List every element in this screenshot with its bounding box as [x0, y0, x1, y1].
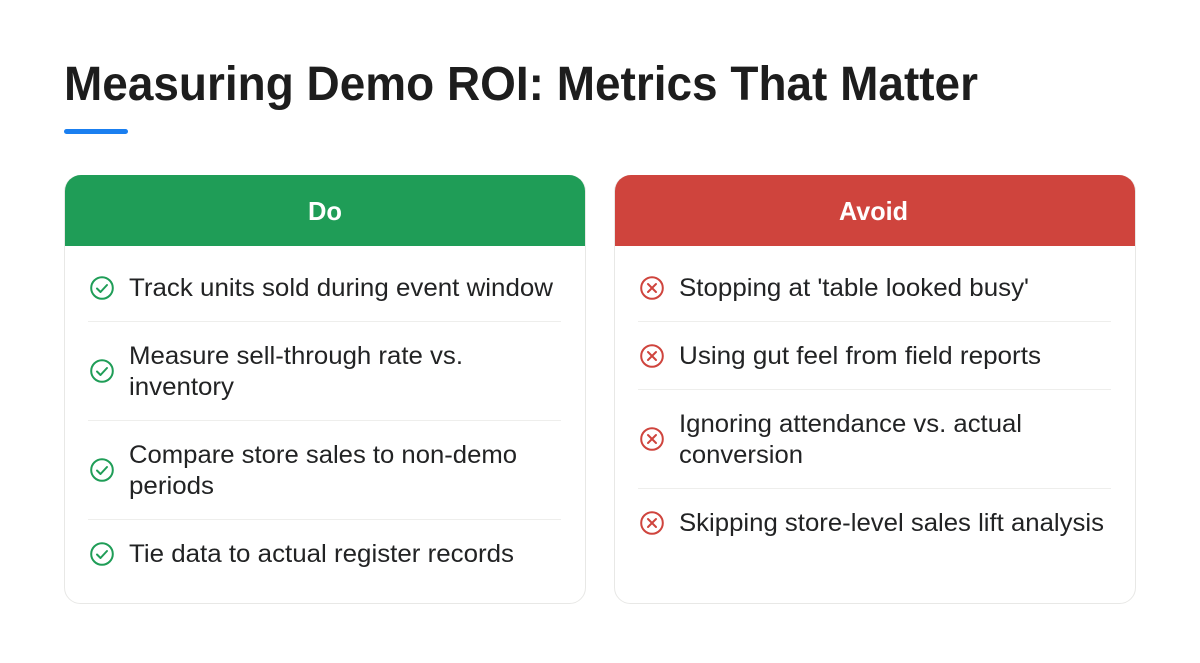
do item: compare store sales: [91, 441, 517, 500]
panel: do: [64, 175, 586, 604]
do item: track units: Track units sold during event window: [129, 274, 554, 302]
do heading: Do: [308, 196, 342, 226]
avoid item: sales lift: Skipping store-level sales lift analysis: [679, 509, 1104, 537]
title accent underline: [64, 129, 128, 134]
panel: avoid: [614, 175, 1136, 604]
avoid card background: [614, 176, 1136, 604]
avoid item: ignoring attendance: Ignoring attendance vs. actual: [679, 410, 1022, 438]
do item: sell-through: inventory: [129, 373, 235, 401]
avoid item: ignoring attendance: [641, 410, 1022, 469]
avoid item: gut feel: Using gut feel from field reports: [679, 342, 1041, 370]
do item: compare store sales: Compare store sales to non-demo: [129, 441, 517, 469]
do item: register records: Tie data to actual register records: [129, 540, 514, 568]
do item: sell-through: [91, 342, 463, 401]
do item: compare store sales: periods: [129, 472, 214, 500]
do header: [65, 175, 585, 246]
avoid header: [615, 175, 1135, 246]
avoid heading: Avoid: [839, 196, 908, 226]
avoid item: table looked busy: Stopping at 'table looked busy': [679, 274, 1029, 302]
do item: sell-through: Measure sell-through rate vs.: [129, 342, 463, 370]
title: Measuring Demo ROI: Metrics That Matter: [64, 58, 978, 111]
avoid item: ignoring attendance: conversion: [679, 441, 803, 469]
do card background: [64, 176, 586, 604]
